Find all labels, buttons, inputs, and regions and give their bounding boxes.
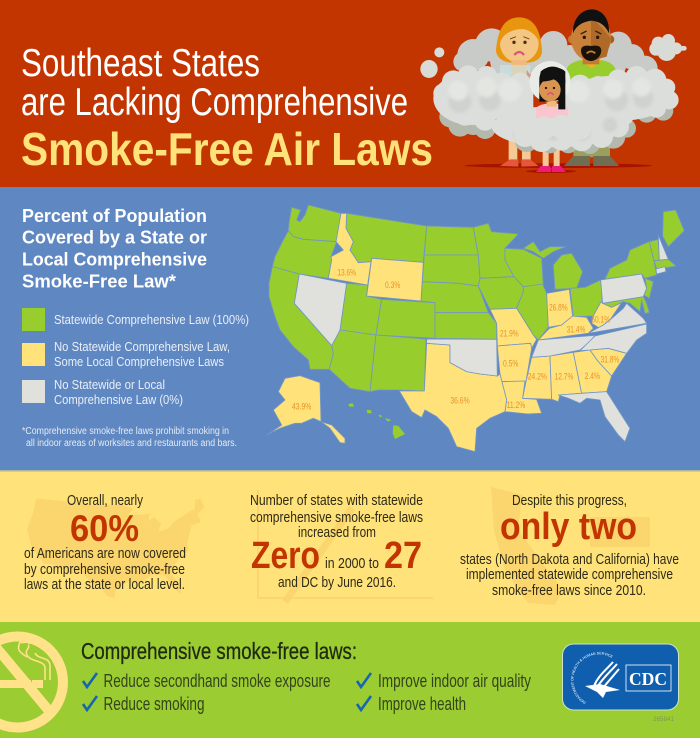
map heading: Smoke-Free Law* — [22, 270, 177, 292]
footnote — [22, 426, 237, 449]
state percentage labels: 26.8% — [549, 303, 568, 313]
watermark: California and North Dakota — [491, 487, 650, 605]
woman — [496, 17, 542, 167]
legend — [22, 308, 249, 407]
stat: 60 percent: by comprehensive smoke-free — [24, 561, 185, 578]
US map — [267, 205, 684, 452]
stat: 60 percent — [24, 492, 186, 593]
legend: Comprehensive Law (0%) — [54, 392, 183, 407]
states: no law — [294, 235, 668, 442]
footnote: all indoor areas of worksites and restaurants and bars. — [26, 438, 237, 449]
state percentage labels: 12.7% — [555, 371, 573, 381]
state percentage labels: 31.8% — [601, 354, 619, 364]
states: comprehensive law — [269, 205, 684, 392]
illustration: family in smoke cloud — [420, 9, 687, 173]
benefit list: Improve indoor air quality — [378, 671, 531, 691]
state percentage labels — [292, 268, 619, 412]
Hawaii — [348, 403, 405, 439]
benefit list — [83, 671, 531, 714]
benefit list: Reduce smoking — [104, 694, 204, 714]
stat: 60 percent: Overall, nearly — [67, 492, 143, 509]
man — [564, 9, 619, 166]
watermark: US map — [27, 499, 204, 598]
panel: map — [0, 187, 700, 470]
state percentage labels: 2.4% — [585, 371, 600, 381]
panel: statistics — [0, 470, 700, 621]
legend: No Statewide Comprehensive Law, — [54, 339, 230, 354]
stat: only two: only two — [500, 506, 637, 548]
stat: zero to 27: and DC by June 2016. — [278, 574, 396, 591]
stat: only two: Despite this progress, — [512, 492, 627, 509]
benefit list: Reduce secondhand smoke exposure — [104, 671, 330, 691]
state percentage labels: 11.2% — [507, 400, 525, 410]
benefits heading: Comprehensive smoke-free laws: — [81, 638, 357, 664]
footnote: *Comprehensive smoke-free laws prohibit smoking in — [22, 426, 229, 437]
stat: 60 percent: 60% — [70, 508, 139, 549]
icon: no smoking — [0, 636, 63, 728]
stat: zero to 27: Zero — [251, 535, 320, 577]
child — [536, 67, 568, 118]
stat: only two: smoke-free laws since 2010. — [492, 582, 646, 599]
map heading: Percent of Population — [22, 205, 207, 226]
state percentage labels: 31.4% — [567, 325, 585, 335]
benefit list: Improve health — [378, 694, 466, 714]
stat: zero to 27 — [250, 492, 423, 591]
state percentage labels: 36.6% — [450, 395, 470, 405]
legend: Statewide Comprehensive Law (100%) — [54, 312, 249, 327]
CDC logo: DEPARTMENT OF HEALTH & HUMAN SERVICES USA — [570, 652, 613, 704]
panel: header — [0, 0, 700, 187]
title: are Lacking Comprehensive — [21, 81, 408, 124]
title — [21, 42, 433, 175]
stat: 60 percent: of Americans are now covered — [24, 545, 186, 562]
CDC logo: CDC — [629, 669, 667, 689]
legend: Some Local Comprehensive Laws — [54, 354, 224, 369]
state percentage labels: 13.6% — [337, 268, 356, 278]
watermark: rising line chart — [258, 490, 433, 602]
stat: zero to 27: in 2000 to — [325, 555, 379, 572]
map heading: Local Comprehensive — [22, 248, 207, 270]
state percentage labels: 0.5% — [503, 359, 518, 369]
state percentage labels: 60.1% — [591, 315, 610, 325]
state percentage labels: 0.3% — [385, 280, 400, 290]
stat: zero to 27: increased from — [298, 524, 376, 541]
title: Smoke-Free Air Laws — [21, 123, 433, 175]
state percentage labels: 43.9% — [292, 402, 311, 412]
stat: 60 percent: laws at the state or local level. — [24, 576, 185, 593]
states: local laws only — [267, 213, 627, 452]
stat: zero to 27: comprehensive smoke-free laws — [250, 509, 423, 526]
map heading — [22, 205, 207, 292]
child legs — [536, 143, 566, 172]
state percentage labels: 24.2% — [528, 371, 547, 381]
title: Southeast States — [21, 42, 260, 85]
document number: 265841 — [653, 717, 675, 723]
map heading: Covered by a State or — [22, 226, 207, 248]
state percentage labels: 21.9% — [500, 329, 519, 339]
stat: zero to 27: Number of states with statewide — [250, 492, 423, 509]
stat: zero to 27: 27 — [384, 535, 422, 577]
legend: No Statewide or Local — [54, 377, 165, 392]
stat: only two — [460, 492, 679, 599]
